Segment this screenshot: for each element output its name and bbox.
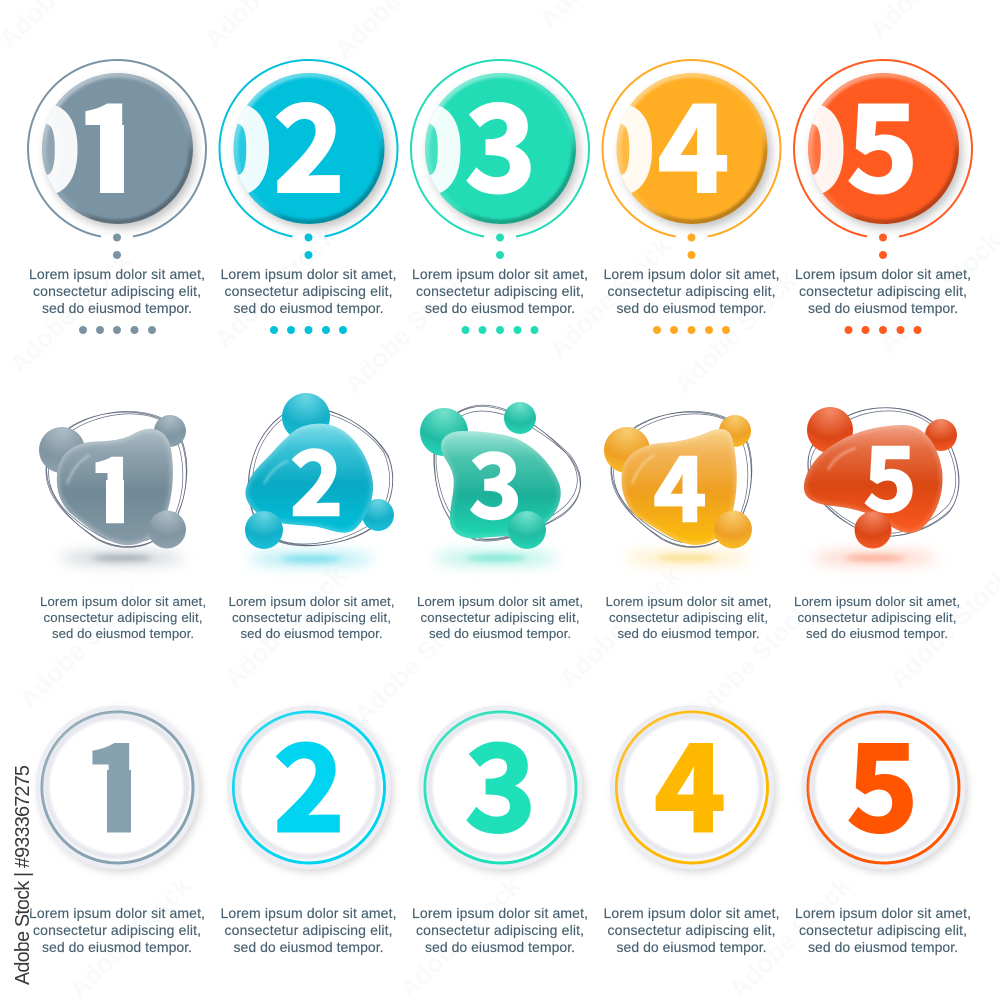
faint background watermark pattern: Adobe Stock bbox=[543, 230, 677, 364]
text blocks: row 3 captions: sed do eiusmod tempor. bbox=[425, 939, 575, 955]
ring badge 1 bbox=[36, 692, 200, 871]
text blocks: row 2 captions bbox=[40, 594, 960, 641]
ring badge 2 bbox=[227, 692, 392, 871]
badge 04 bbox=[587, 52, 780, 259]
badge 04: 4 bbox=[658, 52, 729, 226]
badge 03 bbox=[396, 52, 589, 259]
text blocks: row 2 captions: consectetur adipiscing elit, bbox=[798, 610, 956, 625]
panel: row 3 ring badges bbox=[36, 692, 966, 871]
text blocks: row 2 captions: consectetur adipiscing elit, bbox=[232, 610, 391, 625]
faint background watermark pattern: Adobe Stock bbox=[668, 265, 802, 399]
blob badge 3: 3 bbox=[469, 415, 522, 544]
text blocks: row 3 captions: Lorem ipsum dolor sit amet, bbox=[29, 905, 205, 921]
faint background watermark pattern: Adobe Stock bbox=[553, 560, 687, 694]
text blocks: row 2 captions: consectetur adipiscing elit, bbox=[44, 610, 202, 625]
row 1 dot rows bbox=[79, 326, 922, 334]
text blocks: row 1 captions: consectetur adipiscing elit, bbox=[224, 283, 392, 299]
text blocks: row 2 captions: consectetur adipiscing elit, bbox=[420, 610, 580, 625]
blob badge 2 bbox=[245, 393, 396, 565]
ring badge 5: 5 bbox=[847, 692, 918, 866]
text blocks: row 3 captions: consectetur adipiscing elit, bbox=[33, 922, 201, 938]
text blocks: row 1 captions: Lorem ipsum dolor sit amet, bbox=[412, 266, 588, 282]
text blocks: row 2 captions: Lorem ipsum dolor sit amet, bbox=[794, 594, 960, 609]
text blocks: row 2 captions: sed do eiusmod tempor. bbox=[806, 626, 948, 641]
text blocks: row 3 captions: Lorem ipsum dolor sit amet, bbox=[412, 905, 588, 921]
badge 03: 0 bbox=[396, 61, 462, 223]
badge 05: 0 bbox=[779, 61, 845, 223]
badge 03: 3 bbox=[465, 52, 536, 226]
text blocks: row 3 captions: Lorem ipsum dolor sit amet, bbox=[795, 905, 971, 921]
text blocks: row 3 captions: consectetur adipiscing elit, bbox=[608, 922, 776, 938]
ring badge 4: 4 bbox=[655, 692, 725, 866]
ring badge 3: 3 bbox=[465, 692, 536, 866]
badge 05 bbox=[779, 52, 972, 259]
text blocks: row 1 captions: Lorem ipsum dolor sit amet, bbox=[220, 266, 396, 282]
text blocks: row 2 captions: Lorem ipsum dolor sit amet, bbox=[606, 594, 772, 609]
text blocks: row 1 captions: Lorem ipsum dolor sit amet, bbox=[29, 266, 205, 282]
faint background watermark pattern: Adobe Stock bbox=[218, 560, 352, 694]
text blocks: row 3 captions: Lorem ipsum dolor sit amet, bbox=[220, 905, 396, 921]
ring badge 4 bbox=[610, 692, 775, 871]
text blocks: row 1 captions: Lorem ipsum dolor sit amet, bbox=[604, 266, 780, 282]
badge 01: 1 bbox=[74, 52, 145, 226]
blob badge 1 bbox=[39, 407, 191, 564]
text blocks: row 1 captions: Lorem ipsum dolor sit amet, bbox=[795, 266, 971, 282]
blob badge 2: 2 bbox=[290, 412, 343, 541]
faint background watermark pattern: Adobe Stock bbox=[683, 595, 817, 729]
text blocks: row 1 captions: sed do eiusmod tempor. bbox=[808, 300, 958, 316]
badge 01 bbox=[13, 52, 206, 259]
blob badge 3 bbox=[420, 402, 584, 564]
blob badge 4: 4 bbox=[654, 418, 706, 547]
ring badge 1: 1 bbox=[81, 692, 152, 866]
text blocks: row 2 captions: sed do eiusmod tempor. bbox=[618, 626, 760, 641]
text blocks: row 1 captions: sed do eiusmod tempor. bbox=[234, 300, 384, 316]
blob badge 1: 1 bbox=[87, 419, 140, 548]
text blocks: row 1 captions: consectetur adipiscing elit, bbox=[33, 283, 201, 299]
ring badge 5 bbox=[802, 692, 966, 871]
vertical stock id label: Adobe Stock | #933367275 bbox=[12, 765, 34, 985]
blob badge 5: 5 bbox=[864, 408, 916, 537]
faint background watermark pattern: Adobe Stock bbox=[348, 595, 482, 729]
badge 02 bbox=[204, 52, 398, 259]
faint background watermark pattern: Adobe Stock bbox=[13, 580, 147, 714]
text blocks: row 2 captions: Lorem ipsum dolor sit amet, bbox=[417, 594, 583, 609]
text blocks: row 1 captions: consectetur adipiscing elit, bbox=[416, 283, 584, 299]
text blocks: row 3 captions: consectetur adipiscing elit, bbox=[416, 922, 584, 938]
badge 04: 0 bbox=[587, 61, 654, 223]
text blocks: row 2 captions: sed do eiusmod tempor. bbox=[240, 626, 382, 641]
text blocks: row 3 captions bbox=[29, 905, 971, 955]
text blocks: row 2 captions: sed do eiusmod tempor. bbox=[52, 626, 194, 641]
ring badge 2: 2 bbox=[274, 692, 344, 866]
text blocks: row 3 captions: consectetur adipiscing elit, bbox=[799, 922, 967, 938]
text blocks: row 3 captions: sed do eiusmod tempor. bbox=[616, 939, 766, 955]
text blocks: row 2 captions: sed do eiusmod tempor. bbox=[429, 626, 571, 641]
badge 02: 2 bbox=[274, 52, 344, 226]
badge 02: 0 bbox=[204, 61, 270, 223]
ring badge 3 bbox=[418, 692, 584, 871]
text blocks: row 3 captions: sed do eiusmod tempor. bbox=[234, 939, 384, 955]
text blocks: row 3 captions: sed do eiusmod tempor. bbox=[808, 939, 958, 955]
text blocks: row 3 captions: consectetur adipiscing elit, bbox=[224, 922, 392, 938]
blob badge 5 bbox=[804, 404, 962, 564]
panel: row 2 liquid blobs bbox=[39, 393, 962, 565]
badge 01: 0 bbox=[13, 61, 79, 223]
text blocks: row 1 captions: sed do eiusmod tempor. bbox=[425, 300, 575, 316]
panel: row 1 glossy discs bbox=[13, 52, 972, 259]
faint background watermark pattern: Adobe Stock bbox=[208, 220, 342, 354]
text blocks: row 1 captions: consectetur adipiscing elit, bbox=[608, 283, 776, 299]
text blocks: row 1 captions: sed do eiusmod tempor. bbox=[616, 300, 766, 316]
badge 05: 5 bbox=[847, 52, 918, 226]
text blocks: row 1 captions: consectetur adipiscing elit, bbox=[799, 283, 967, 299]
text blocks: row 3 captions: sed do eiusmod tempor. bbox=[42, 939, 192, 955]
text blocks: row 2 captions: consectetur adipiscing elit, bbox=[609, 610, 768, 625]
blob badge 4 bbox=[604, 407, 756, 564]
text blocks: row 1 captions: sed do eiusmod tempor. bbox=[42, 300, 192, 316]
text blocks: row 1 captions bbox=[29, 266, 971, 316]
text blocks: row 2 captions: Lorem ipsum dolor sit amet, bbox=[40, 594, 206, 609]
text blocks: row 3 captions: Lorem ipsum dolor sit amet, bbox=[604, 905, 780, 921]
faint background watermark pattern: Adobe Stock bbox=[338, 265, 472, 399]
text blocks: row 2 captions: Lorem ipsum dolor sit amet, bbox=[228, 594, 394, 609]
faint background watermark pattern: Adobe Stock bbox=[3, 245, 137, 379]
